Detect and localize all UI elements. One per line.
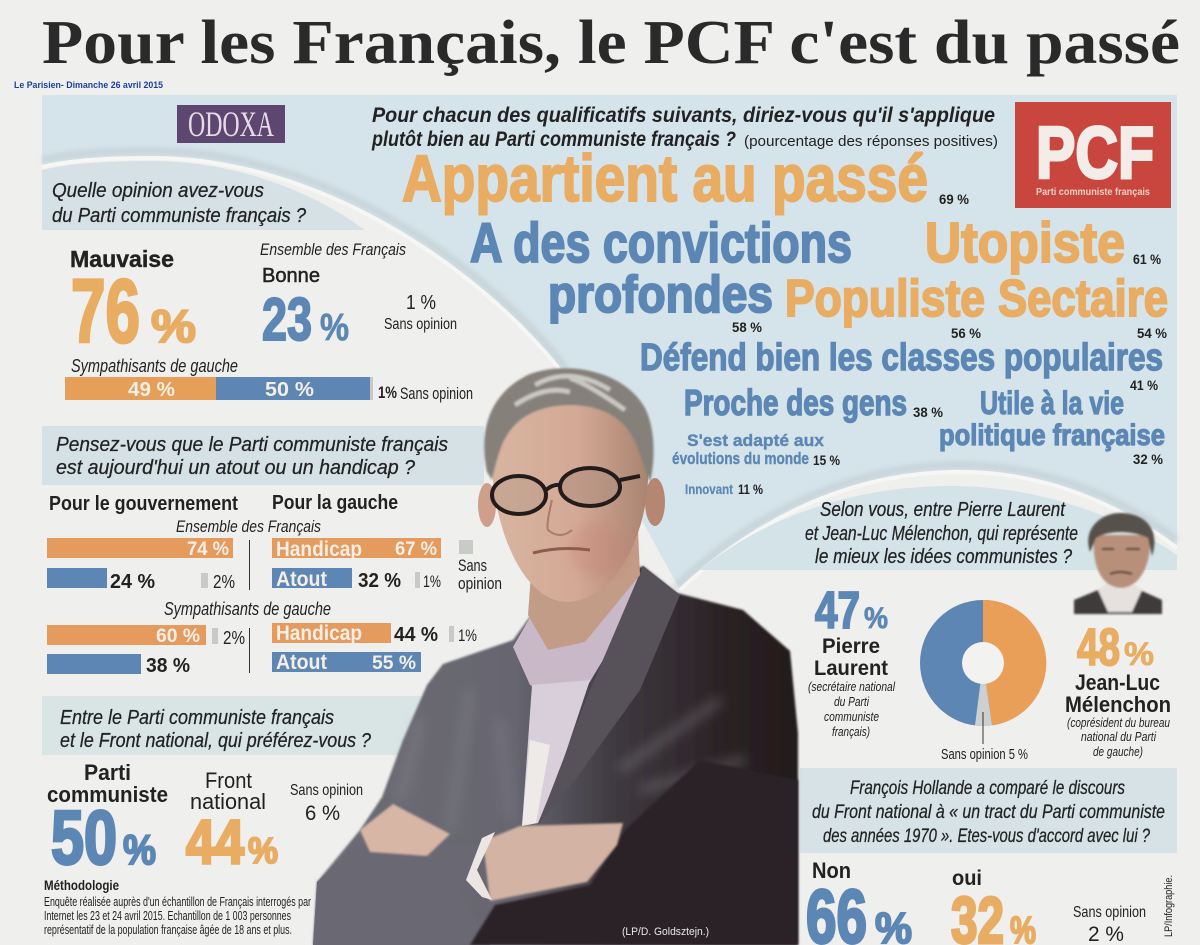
main question heading: (pourcentage des réponses positives) <box>744 133 998 150</box>
shirt collar <box>513 573 645 690</box>
result: bonne 23%: Ensemble des Français <box>260 240 406 259</box>
word cloud of qualifiers: politique française <box>939 419 1165 452</box>
result: oui 32% <box>951 867 1036 945</box>
cuff <box>466 832 495 900</box>
heading: atout question: est aujourd'hui un atout ou un handicap ? <box>56 457 416 479</box>
heading: Laurent question: le mieux les idées communistes ? <box>815 546 1073 568</box>
main question heading: plutôt bien au Parti communiste français ? <box>371 128 736 151</box>
ear right <box>645 478 665 526</box>
result: front national 44%: % <box>248 830 278 871</box>
heading: opinion question: Quelle opinion avez-vous <box>52 180 264 202</box>
result: parti communiste 50%: Parti <box>84 760 131 785</box>
result: parti communiste 50%: communiste <box>47 782 168 807</box>
bars: gauche, ensemble <box>272 538 441 592</box>
result: mauvaise 76%: % <box>151 300 196 352</box>
bars: gouvernement, ensemble: 74 % <box>187 539 229 560</box>
panel: Hollande comparison <box>800 768 1177 945</box>
stacked bar: sympathisants de gauche: Sans opinion <box>400 384 473 403</box>
result: Mélenchon 48%: 48 <box>1077 619 1120 677</box>
logo: Odoxa: ODOXA <box>188 104 274 144</box>
result: parti communiste 50% <box>47 760 168 881</box>
result: bonne 23%: 23 <box>262 286 312 353</box>
result: Pierre Laurent 47%: communiste <box>824 709 879 724</box>
cheek blush <box>570 522 630 578</box>
result: front national 44% <box>186 768 278 877</box>
result: sans opinion 1%: Sans opinion <box>384 316 457 333</box>
dark sleeve bottom <box>470 760 798 945</box>
jacket folds <box>400 690 760 870</box>
forearm and hand right <box>483 823 623 901</box>
main question heading: Pour chacun des qualificatifs suivants, diriez-vous qu'il s'applique <box>372 104 995 127</box>
bars: gouvernement, ensemble: 2% <box>213 572 235 592</box>
photo credit: (LP/D. Goldsztejn.) <box>622 926 709 938</box>
result: Pierre Laurent 47%: du Parti <box>834 694 870 709</box>
word cloud of qualifiers <box>402 141 1168 497</box>
word cloud of qualifiers: Utopiste <box>925 211 1125 275</box>
bars: gauche, ensemble: Atout <box>276 568 327 591</box>
jacket <box>313 566 798 945</box>
legend: sans opinion <box>458 540 502 593</box>
hair <box>484 368 654 482</box>
result: sans opinion 1% <box>384 292 457 333</box>
result: mauvaise 76%: 76 <box>71 262 140 362</box>
heading: Hollande question <box>800 768 1177 853</box>
hand left <box>360 804 450 856</box>
word cloud of qualifiers: 61 % <box>1133 251 1161 267</box>
result: Mélenchon 48%: Mélenchon <box>1065 692 1171 717</box>
photo: Pierre Laurent <box>313 368 798 945</box>
result: bonne 23%: % <box>320 307 349 349</box>
panel: atout ou handicap <box>42 426 502 677</box>
logo: Odoxa <box>177 104 285 144</box>
stacked bar: sympathisants de gauche: 49 % <box>128 379 175 401</box>
word cloud of qualifiers: évolutions du monde <box>672 449 809 468</box>
blue background panel <box>42 95 1177 590</box>
bars: gauche, sympathisants: Handicap <box>276 622 362 645</box>
word cloud of qualifiers: 58 % <box>732 319 763 335</box>
mouth <box>533 549 590 553</box>
result: Pierre Laurent 47%: Laurent <box>814 657 888 680</box>
word cloud of qualifiers: 69 % <box>939 191 970 207</box>
bars: gouvernement, ensemble: 24 % <box>110 571 155 593</box>
legend: sans opinion: Sans <box>458 556 487 575</box>
result: non 66% <box>806 858 912 945</box>
stacked bar: sympathisants de gauche: 1% <box>378 383 397 402</box>
heading: preference question <box>42 696 442 755</box>
heading: Laurent question: et Jean-Luc Mélenchon, qui représente <box>805 523 1078 545</box>
nose <box>548 500 572 535</box>
panel: PCF ou FN <box>42 696 442 937</box>
bars: gauche, sympathisants <box>272 622 477 674</box>
stacked bar: sympathisants de gauche <box>65 356 473 403</box>
word cloud of qualifiers: Populiste <box>785 270 985 328</box>
word cloud of qualifiers: Innovant <box>685 481 733 497</box>
bars: gouvernement, sympathisants: 38 % <box>146 655 190 677</box>
result: front national 44%: 44 <box>186 808 244 877</box>
logo: PCF <box>1015 102 1171 208</box>
donut chart <box>920 600 1046 763</box>
methodology note: Enquête réalisée auprès d'un échantillon de Français interrogés par <box>44 895 311 909</box>
methodology note: représentatif de la population française âgée de 18 ans et plus. <box>44 923 292 937</box>
heading: preference question: et le Front national, qui préférez-vous ? <box>60 730 372 752</box>
heading: opinion question <box>42 161 365 230</box>
heading: Laurent question <box>700 486 1177 570</box>
right lapel <box>538 566 680 825</box>
logo: PCF: PCF <box>1036 113 1154 194</box>
result: sans opinion 2% <box>1073 904 1146 945</box>
heading: opinion question: du Parti communiste français ? <box>52 205 307 227</box>
title: Pour les Français, le PCF c'est du passé <box>42 9 1180 77</box>
bars: gauche, sympathisants: 1% <box>458 626 477 645</box>
result: Mélenchon 48% <box>1065 619 1171 759</box>
result: Mélenchon 48%: de gauche) <box>1093 744 1143 759</box>
result: parti communiste 50%: 50 <box>51 796 117 881</box>
credit: infographie: LP/Infographie. <box>1163 875 1175 937</box>
ear left <box>478 483 496 527</box>
heading: Hollande question: François Hollande a comparé le discours <box>850 778 1125 799</box>
word cloud of qualifiers: profondes <box>548 266 773 324</box>
face <box>492 400 648 602</box>
legend: sans opinion: opinion <box>458 574 502 593</box>
result: Pierre Laurent 47% <box>808 582 896 739</box>
column headings <box>49 492 398 536</box>
result: Pierre Laurent 47%: Pierre <box>822 635 880 658</box>
panel: opinion on the PCF <box>42 161 473 403</box>
column headings: Ensemble des Français <box>176 517 321 536</box>
stacked bar: sympathisants de gauche: Sympathisants de gauche <box>71 356 238 376</box>
bars: gauche, ensemble: 67 % <box>395 539 437 560</box>
donut chart: Sans opinion 5 % <box>941 746 1028 763</box>
stacked bar: sympathisants de gauche: 50 % <box>265 379 314 401</box>
result: Pierre Laurent 47%: 47 <box>815 582 860 640</box>
heading: atout question: Pensez-vous que le Parti communiste français <box>56 434 448 456</box>
bars: gauche, ensemble: Handicap <box>276 538 362 561</box>
result: Pierre Laurent 47%: français) <box>832 724 870 739</box>
word cloud of qualifiers: Proche des gens <box>684 382 907 423</box>
result: oui 32%: oui <box>952 867 982 890</box>
result: parti communiste 50%: % <box>123 826 156 873</box>
column headings: Pour le gouvernement <box>49 493 238 515</box>
logo: PCF: Parti communiste français <box>1036 186 1150 198</box>
result: front national 44%: Front <box>205 768 252 793</box>
result: sans opinion 1%: 1 % <box>406 292 436 314</box>
result: Pierre Laurent 47%: % <box>864 602 888 635</box>
neck <box>528 530 640 650</box>
word cloud of qualifiers: 38 % <box>913 404 944 420</box>
word cloud of qualifiers: Sectaire <box>998 270 1168 328</box>
methodology note: Internet les 23 et 24 avril 2015. Echantillon de 1 003 personnes <box>44 909 291 923</box>
heading: Laurent question: Selon vous, entre Pierre Laurent <box>820 499 1066 521</box>
result: sans opinion 6%: 6 % <box>305 802 340 825</box>
methodology note <box>44 877 311 937</box>
bars: gauche, sympathisants: 55 % <box>372 653 416 674</box>
bars: gauche, sympathisants: 44 % <box>394 624 438 646</box>
result: bonne 23% <box>260 240 406 353</box>
hair highlights <box>515 376 625 410</box>
result: mauvaise 76% <box>70 246 196 362</box>
column headings: Pour la gauche <box>272 492 398 514</box>
result: Mélenchon 48%: Jean-Luc <box>1075 670 1160 695</box>
bars: gouvernement, sympathisants: 2% <box>223 628 245 648</box>
source line: Le Parisien- Dimanche 26 avril 2015 <box>14 80 164 91</box>
bars: gouvernement, sympathisants: 60 % <box>156 626 200 647</box>
subheading: sympathisants: Sympathisants de gauche <box>164 599 331 619</box>
result: front national 44%: national <box>190 789 266 814</box>
shirt front <box>522 680 590 826</box>
panel: Laurent vs Mélenchon <box>700 486 1177 763</box>
bars: gouvernement, ensemble <box>47 538 235 593</box>
result: Mélenchon 48%: (coprésident du bureau <box>1067 715 1170 730</box>
word cloud of qualifiers: 56 % <box>951 325 982 341</box>
word cloud of qualifiers: 15 % <box>813 452 840 468</box>
heading: preference question: Entre le Parti communiste français <box>60 707 334 729</box>
main question heading <box>371 104 998 151</box>
word cloud of qualifiers: 11 % <box>738 481 763 497</box>
result: non 66%: Non <box>812 858 851 883</box>
word cloud of qualifiers: 41 % <box>1130 377 1158 393</box>
glasses <box>492 468 640 514</box>
bars: gauche, ensemble: 1% <box>423 572 441 591</box>
result: bonne 23%: Bonne <box>262 265 320 287</box>
word cloud of qualifiers: Appartient au passé <box>402 141 928 215</box>
word cloud of qualifiers: A des convictions <box>470 211 852 274</box>
result: Mélenchon 48%: national du Parti <box>1081 729 1157 744</box>
portrait: Mélenchon <box>1074 513 1162 614</box>
bars: gauche, ensemble: 32 % <box>358 570 401 592</box>
heading: atout question <box>42 426 484 485</box>
sleeve lower left <box>313 845 490 945</box>
methodology note: Méthodologie <box>44 877 119 893</box>
word cloud of qualifiers: 32 % <box>1133 451 1164 467</box>
result: Pierre Laurent 47%: (secrétaire national <box>808 679 896 694</box>
result: sans opinion 6% <box>290 782 363 825</box>
result: Mélenchon 48%: % <box>1124 636 1154 672</box>
result: sans opinion 6%: Sans opinion <box>290 782 363 799</box>
bars: gauche, sympathisants: Atout <box>276 651 327 674</box>
word cloud of qualifiers: 54 % <box>1137 325 1168 341</box>
word cloud of qualifiers: S'est adapté aux <box>687 431 825 450</box>
bars: gouvernement, sympathisants <box>47 625 245 677</box>
word cloud of qualifiers: Utile à la vie <box>980 385 1124 421</box>
result: mauvaise 76%: Mauvaise <box>70 246 174 272</box>
result: sans opinion 2%: Sans opinion <box>1073 904 1146 921</box>
